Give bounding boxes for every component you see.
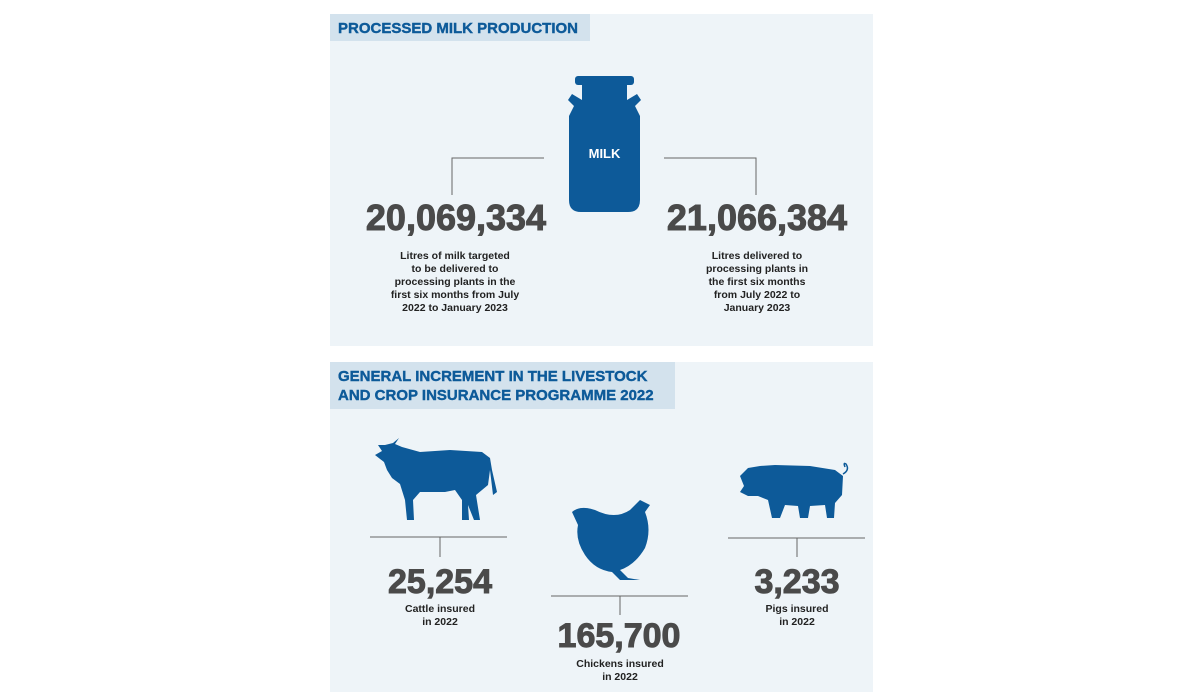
stat: chickens: in 2022 — [602, 671, 638, 683]
stat: chickens: Chickens insured — [576, 658, 664, 670]
connector: right — [664, 158, 756, 195]
icon: pig — [740, 463, 847, 518]
stat: delivered litres: 21,066,384 — [667, 197, 847, 238]
icon: cow — [375, 438, 497, 520]
stat: delivered litres — [667, 197, 847, 314]
stat: cattle — [370, 537, 507, 628]
stat: target litres: first six months from July — [391, 289, 519, 301]
stat: cattle: Cattle insured — [405, 603, 475, 615]
heading: livestock insurance: AND CROP INSURANCE PROGRAMME 2022 — [338, 387, 654, 404]
stat: target litres: to be delivered to — [412, 263, 498, 275]
stat: delivered litres: processing plants in — [706, 263, 808, 275]
panel: processed milk production — [330, 14, 873, 346]
stat: pigs: Pigs insured — [765, 603, 829, 615]
heading: livestock insurance — [330, 362, 675, 409]
stat: target litres: Litres of milk targeted — [400, 250, 510, 262]
stat: delivered litres: from July 2022 to — [714, 289, 800, 301]
stat: target litres: processing plants in the — [395, 276, 516, 288]
stat: chickens: 165,700 — [558, 617, 680, 655]
stat: pigs: 3,233 — [754, 563, 840, 601]
panel: livestock insurance — [330, 362, 873, 692]
heading: livestock insurance: GENERAL INCREMENT IN THE LIVESTOCK — [338, 368, 648, 385]
stat: pigs: in 2022 — [779, 616, 815, 628]
heading: processed milk production: PROCESSED MILK PRODUCTION — [338, 20, 578, 37]
icon: milk can — [568, 76, 641, 212]
connector: left — [452, 158, 544, 195]
stat: delivered litres: Litres delivered to — [712, 250, 802, 262]
stat: delivered litres: the first six months — [709, 276, 806, 288]
stat: target litres: 2022 to January 2023 — [402, 302, 508, 314]
stat: cattle: in 2022 — [422, 616, 458, 628]
stat: delivered litres: January 2023 — [724, 302, 790, 314]
heading: processed milk production — [330, 14, 590, 41]
stat: pigs — [728, 538, 865, 628]
icon: milk can: MILK — [589, 146, 621, 161]
stat: target litres — [366, 197, 546, 314]
stat: chickens — [551, 596, 688, 683]
stat: target litres: 20,069,334 — [366, 197, 546, 238]
stat: cattle: 25,254 — [388, 563, 492, 601]
icon: chicken — [572, 500, 650, 580]
